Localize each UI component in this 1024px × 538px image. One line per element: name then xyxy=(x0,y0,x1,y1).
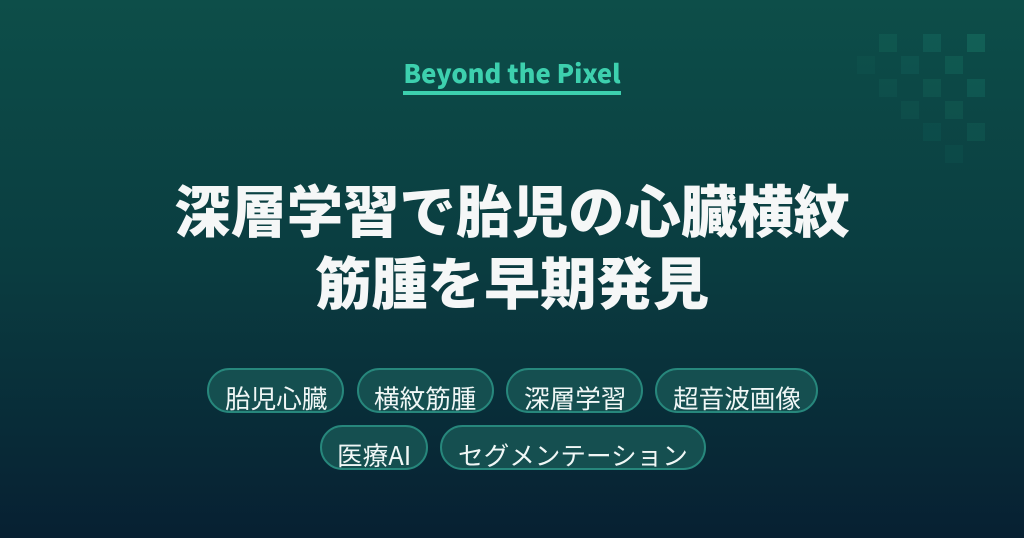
tag: 深層学習 xyxy=(506,368,643,413)
tag: 医療AI xyxy=(320,425,428,470)
tag: 胎児心臓: 胎児心臓 xyxy=(225,379,327,416)
tag: 深層学習: 深層学習 xyxy=(524,379,626,416)
tag: 胎児心臓 xyxy=(207,368,344,413)
tag: 超音波画像: 超音波画像 xyxy=(673,379,801,416)
title: 深層学習で胎児の心臓横紋 xyxy=(174,168,850,249)
tag: セグメンテーション xyxy=(440,425,706,470)
tag: 横紋筋腫: 横紋筋腫 xyxy=(374,379,476,416)
tag: 横紋筋腫 xyxy=(357,368,494,413)
brand label: Beyond the Pixel xyxy=(403,54,621,91)
brand underline xyxy=(403,91,621,95)
title xyxy=(174,168,850,321)
tag: 医療AI: 医療AI xyxy=(337,436,411,473)
title: 筋腫を早期発見 xyxy=(315,240,709,321)
tag: 超音波画像 xyxy=(655,368,818,413)
tag: セグメンテーション: セグメンテーション xyxy=(458,436,688,473)
decorative square pattern xyxy=(879,34,985,141)
